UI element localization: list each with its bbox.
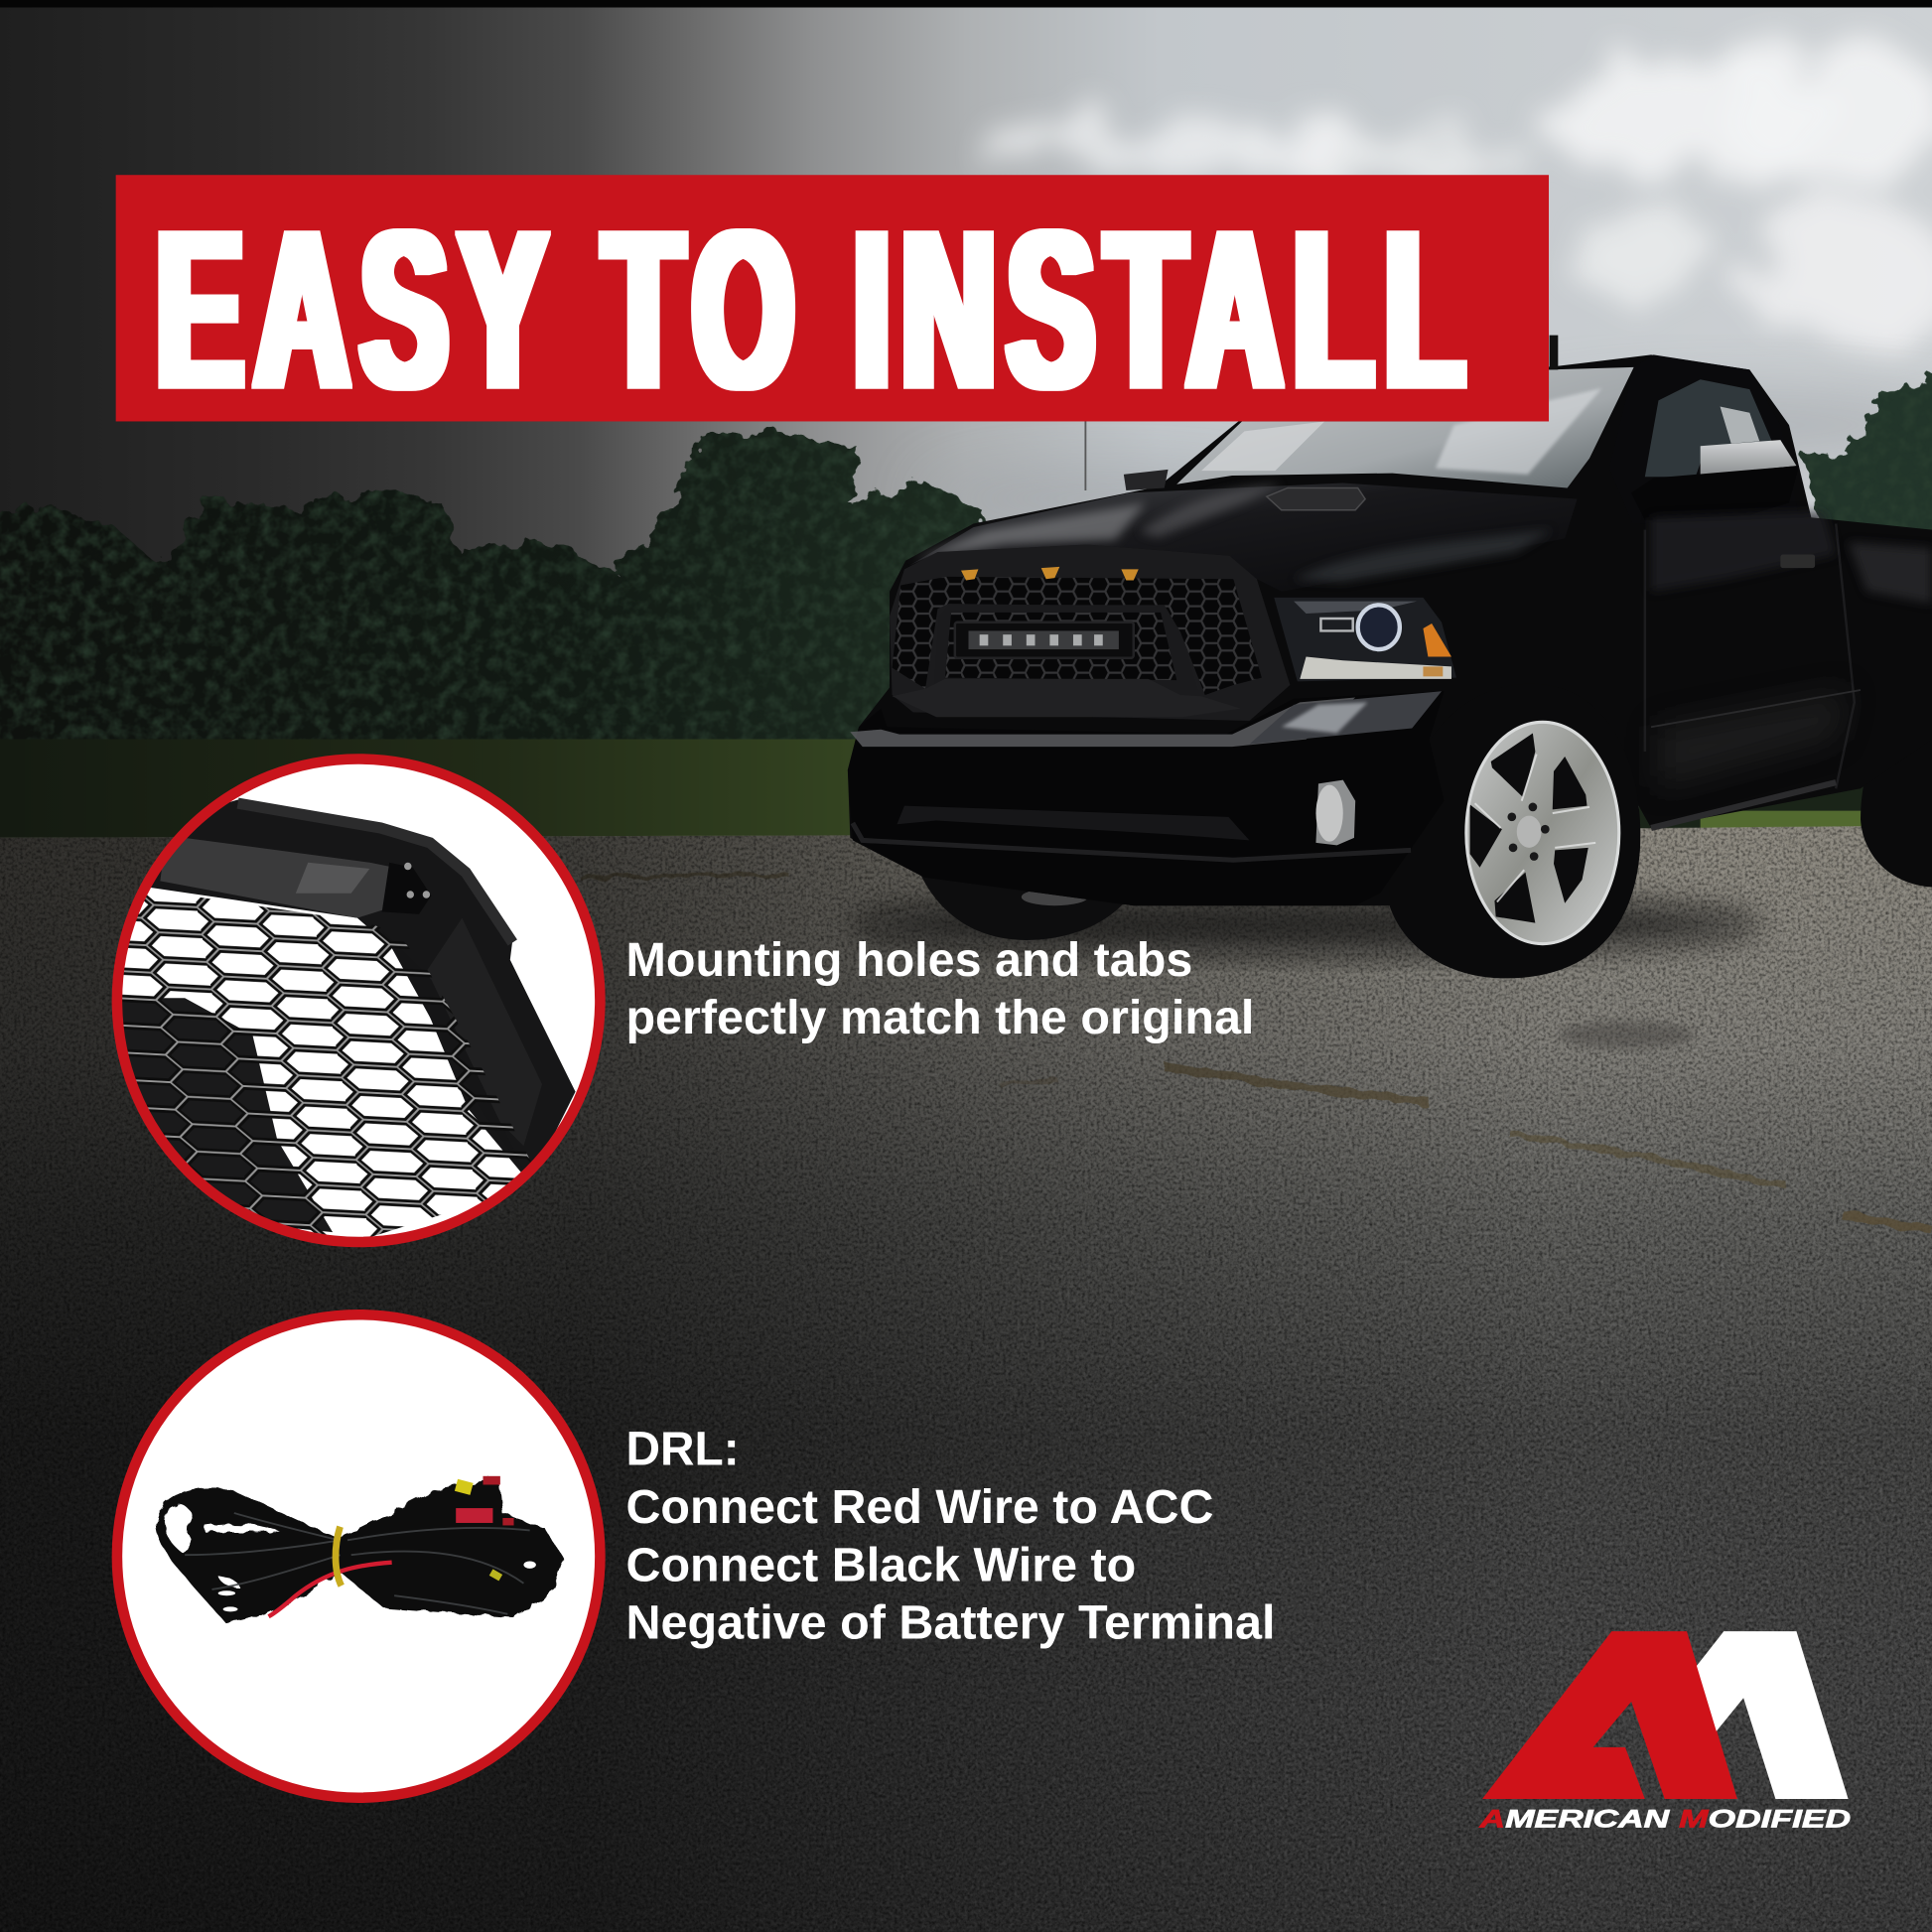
logo: American Modified [1478,1631,1851,1834]
lower intake [897,806,1249,840]
roof aerial [1550,336,1557,369]
door panel sheen [1645,523,1861,828]
pickup truck [848,336,1932,978]
cab pillar [1609,354,1799,523]
callout: DRL wiring text: Connect Black Wire to [625,1538,1136,1591]
truck shadow [850,895,1762,954]
right trees [1805,369,1932,530]
rear tire [1861,684,1932,888]
hexagonal mesh [122,895,530,1237]
bumper [848,691,1445,905]
callout: DRL wiring text: Negative of Battery Terminal [625,1596,1276,1650]
title text: EASY TO INSTALL [157,186,1476,436]
mounting tab [382,863,431,914]
circle: grille mounting detail [98,759,600,1257]
callout: DRL wiring text: DRL: [625,1423,740,1476]
wheel [1390,684,1640,978]
callout: mounting text: perfectly match the original [625,991,1254,1044]
antenna [1084,419,1086,490]
callout: DRL wiring text [625,1423,1276,1650]
connectors [455,1476,514,1581]
red ring [117,1314,600,1798]
hood scoop [1267,487,1365,510]
distant tree line [0,369,1932,763]
top edge strip [0,0,1932,7]
side mirror near hood [1124,470,1169,490]
dark interior behind mesh [111,998,333,1232]
wing mirror [1631,440,1799,520]
chrome rim [1465,721,1620,945]
grille lower lip [893,679,1241,717]
yellow tie [336,1527,342,1586]
grille frame [151,800,576,1172]
callout: mounting text [625,933,1254,1044]
grass strip [0,740,1885,843]
truck body [848,336,1932,905]
red wire [269,1563,392,1616]
circle: wiring harness [117,1314,600,1798]
callout: DRL wiring text: Connect Red Wire to ACC [625,1480,1213,1534]
LED light bar [955,622,1134,658]
logo wordmark: A MERICAN M ODIFIED [1478,1807,1851,1834]
fog lamp [1315,780,1355,845]
callout: mounting text: Mounting holes and tabs [625,933,1192,987]
headlight [1274,598,1456,681]
red ring [117,759,600,1242]
wire bundle [157,1480,561,1623]
logo mark red A [1482,1631,1737,1799]
side window [1645,379,1772,477]
door handle [1780,554,1815,568]
logo mark white 1 [1697,1631,1849,1799]
centre frame [934,605,1197,690]
front tire [918,869,1134,940]
asphalt road [0,823,1932,1932]
title banner [116,175,1549,436]
hood [909,483,1578,592]
sky [0,0,1932,863]
grille [890,545,1290,721]
windshield [1176,367,1634,487]
amber marker lights [961,567,1139,581]
